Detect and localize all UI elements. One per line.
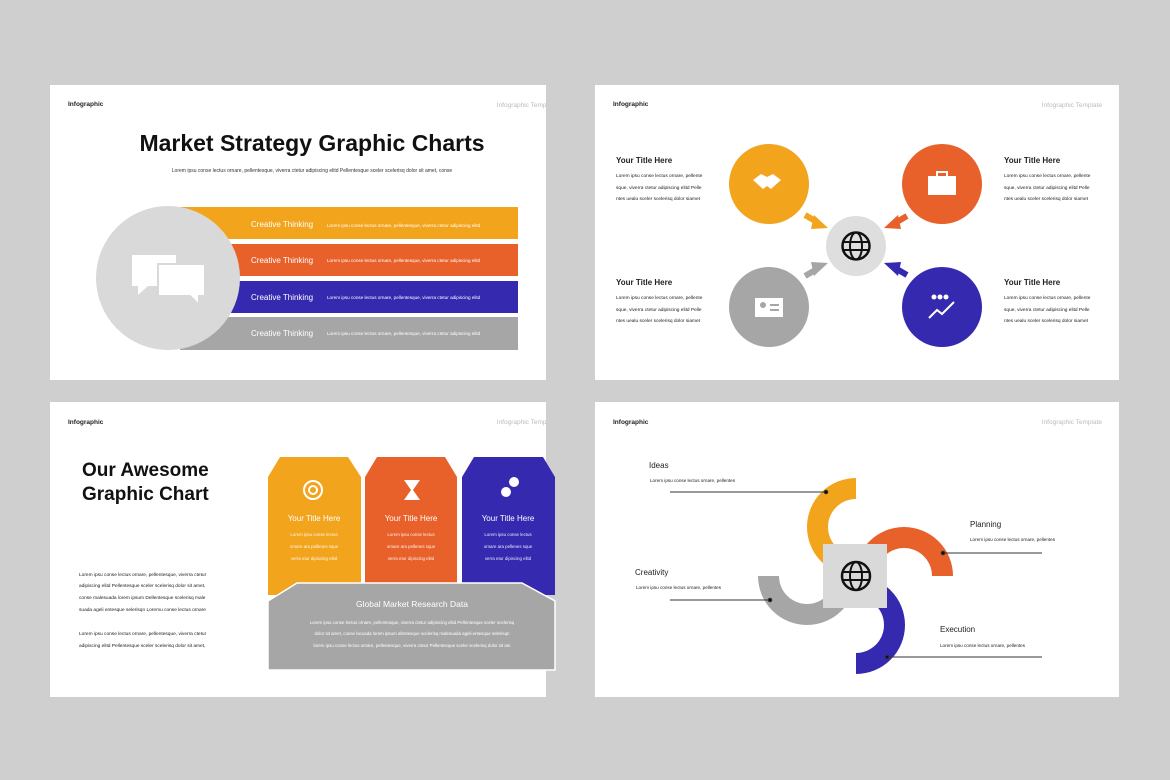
body text: [79, 572, 207, 649]
circle with chat icon: [96, 206, 240, 350]
panel: awesome chart: Infographic Template: [497, 419, 557, 426]
gray data block: [268, 583, 555, 670]
cards: Lorem ipsu conse lectus: [290, 532, 338, 537]
body text: Lorem ipsu conse lectus ornare, pellentesque, viverra ctetur: [79, 572, 207, 578]
bars: Creative Thinking: [251, 220, 313, 229]
text blocks: ntes uealu sceler scelerisq dolor siamet: [1004, 196, 1089, 202]
bars: Lorem ipsu conse lectus ornare, pellentesque, viverra ctetur adipiscing elitd: [327, 295, 481, 300]
body text: adipiscing elitd Pellentesque sceler scelerisq dolor sit amet,: [79, 643, 205, 649]
connector lines: [670, 490, 1042, 659]
gray data block: Lorem ipsu conse lectus ornare, pellentesque, viverra ctetur adipiscing elitd Pellentesque sceler scelerisq: [310, 620, 515, 625]
title: Market Strategy Graphic Charts: [139, 130, 485, 156]
cards: [268, 457, 555, 595]
gray data block: dolor sit amet, conse lacuada lorem ipsum afentesque scelerisq malesuada ageli entesque selerisqn: [314, 631, 510, 636]
center globe square: [823, 544, 887, 608]
header right: Infographic Template: [497, 102, 557, 109]
body text: suada ageli entesque selerisqn Loremu conse lectus ornare: [79, 607, 206, 613]
bars: Creative Thinking: [251, 329, 313, 338]
cards: verra etur dipiscing elitd: [485, 556, 532, 561]
title: Graphic Chart: [82, 484, 209, 505]
text blocks: Lorem ipsu conse lectus ornare, pellente: [1004, 295, 1091, 301]
labels: Lorem ipsu conse lectus ornare, pellentes: [636, 585, 722, 590]
text blocks: Lorem ipsu conse lectus ornare, pellente: [616, 295, 703, 301]
cards: Your Title Here: [482, 514, 535, 523]
text blocks: sque, viverra ctetur adipiscing elitd Pelle: [616, 185, 702, 191]
panel: pinwheel: Infographic Template: [1042, 419, 1102, 426]
arrows: [805, 215, 907, 276]
gray data block: lorem ipsu conse lectus ornare, pellentesque, viverra ctetur Pellentesque sceler scelerisq dolor sit am: [314, 643, 511, 648]
text blocks: sque, viverra ctetur adipiscing elitd Pelle: [1004, 185, 1090, 191]
bars: Lorem ipsu conse lectus ornare, pellentesque, viverra ctetur adipiscing elitd: [327, 331, 481, 336]
text blocks: Your Title Here: [616, 156, 673, 165]
text blocks: sque, viverra ctetur adipiscing elitd Pelle: [1004, 307, 1090, 313]
bars: Creative Thinking: [251, 293, 313, 302]
panel: awesome chart: Infographic: [68, 419, 104, 426]
text blocks: ntes uealu sceler scelerisq dolor siamet: [1004, 318, 1089, 324]
cards: Lorem ipsu conse lectus: [387, 532, 435, 537]
labels: Lorem ipsu conse lectus ornare, pellentes: [970, 537, 1056, 542]
labels: Lorem ipsu conse lectus ornare, pellentes: [650, 478, 736, 483]
labels: Lorem ipsu conse lectus ornare, pellentes: [940, 643, 1026, 648]
gray data block: Global Market Research Data: [356, 599, 468, 609]
text blocks: sque, viverra ctetur adipiscing elitd Pelle: [616, 307, 702, 313]
text blocks: ntes uealu sceler scelerisq dolor siamet: [616, 318, 701, 324]
circles with icons: [729, 144, 982, 347]
bars: Lorem ipsu conse lectus ornare, pellentesque, viverra ctetur adipiscing elitd: [327, 258, 481, 263]
labels: Execution: [940, 625, 975, 634]
text blocks: [616, 156, 1091, 324]
panel: market strategy: [50, 85, 557, 380]
cards: Your Title Here: [288, 514, 341, 523]
cards: verra etur dipiscing elitd: [291, 556, 338, 561]
cards: ornare ara pellenes sque: [484, 544, 533, 549]
text blocks: Your Title Here: [1004, 156, 1061, 165]
labels: Planning: [970, 520, 1001, 529]
header label: Infographic: [68, 101, 104, 108]
arcs: [758, 478, 953, 674]
body text: Lorem ipsu conse lectus ornare, pellentesque, viverra ctetur: [79, 631, 207, 637]
panel: cycle circles: Infographic: [613, 101, 649, 108]
panel: awesome chart: [50, 402, 557, 697]
body text: adipiscing elitd Pellentesque sceler scelerisq dolor sit amet,: [79, 583, 205, 589]
center globe: [826, 216, 886, 276]
panel: cycle circles: [595, 85, 1119, 380]
cards: ornare ara pellenes sque: [290, 544, 339, 549]
labels: Ideas: [649, 461, 669, 470]
cards: ornare ara pellenes sque: [387, 544, 436, 549]
text blocks: Your Title Here: [616, 278, 673, 287]
text blocks: Lorem ipsu conse lectus ornare, pellente: [616, 173, 703, 179]
panel: pinwheel: Infographic: [613, 419, 649, 426]
cards: verra etur dipiscing elitd: [388, 556, 435, 561]
cards: Your Title Here: [385, 514, 438, 523]
title: [82, 460, 209, 505]
bars: Creative Thinking: [251, 256, 313, 265]
text blocks: ntes uealu sceler scelerisq dolor siamet: [616, 196, 701, 202]
panel: cycle circles: Infographic Template: [1042, 102, 1102, 109]
body text: conse malesuada lorem ipsum Dellentesque scelerisq male: [79, 595, 206, 601]
text blocks: Your Title Here: [1004, 278, 1061, 287]
labels: [635, 461, 1056, 648]
bars: [180, 207, 518, 350]
bars: Lorem ipsu conse lectus ornare, pellentesque, viverra ctetur adipiscing elitd: [327, 223, 481, 228]
subtitle: Lorem ipsu conse lectus ornare, pellentesque, viverra ctetur adipiscing elitd Pellentesque sceler scelerisq dolor sit amet, conse: [172, 168, 452, 174]
panel: pinwheel: [595, 402, 1119, 697]
text blocks: Lorem ipsu conse lectus ornare, pellente: [1004, 173, 1091, 179]
cards: Lorem ipsu conse lectus: [484, 532, 532, 537]
labels: Creativity: [635, 568, 668, 577]
title: Our Awesome: [82, 460, 209, 481]
